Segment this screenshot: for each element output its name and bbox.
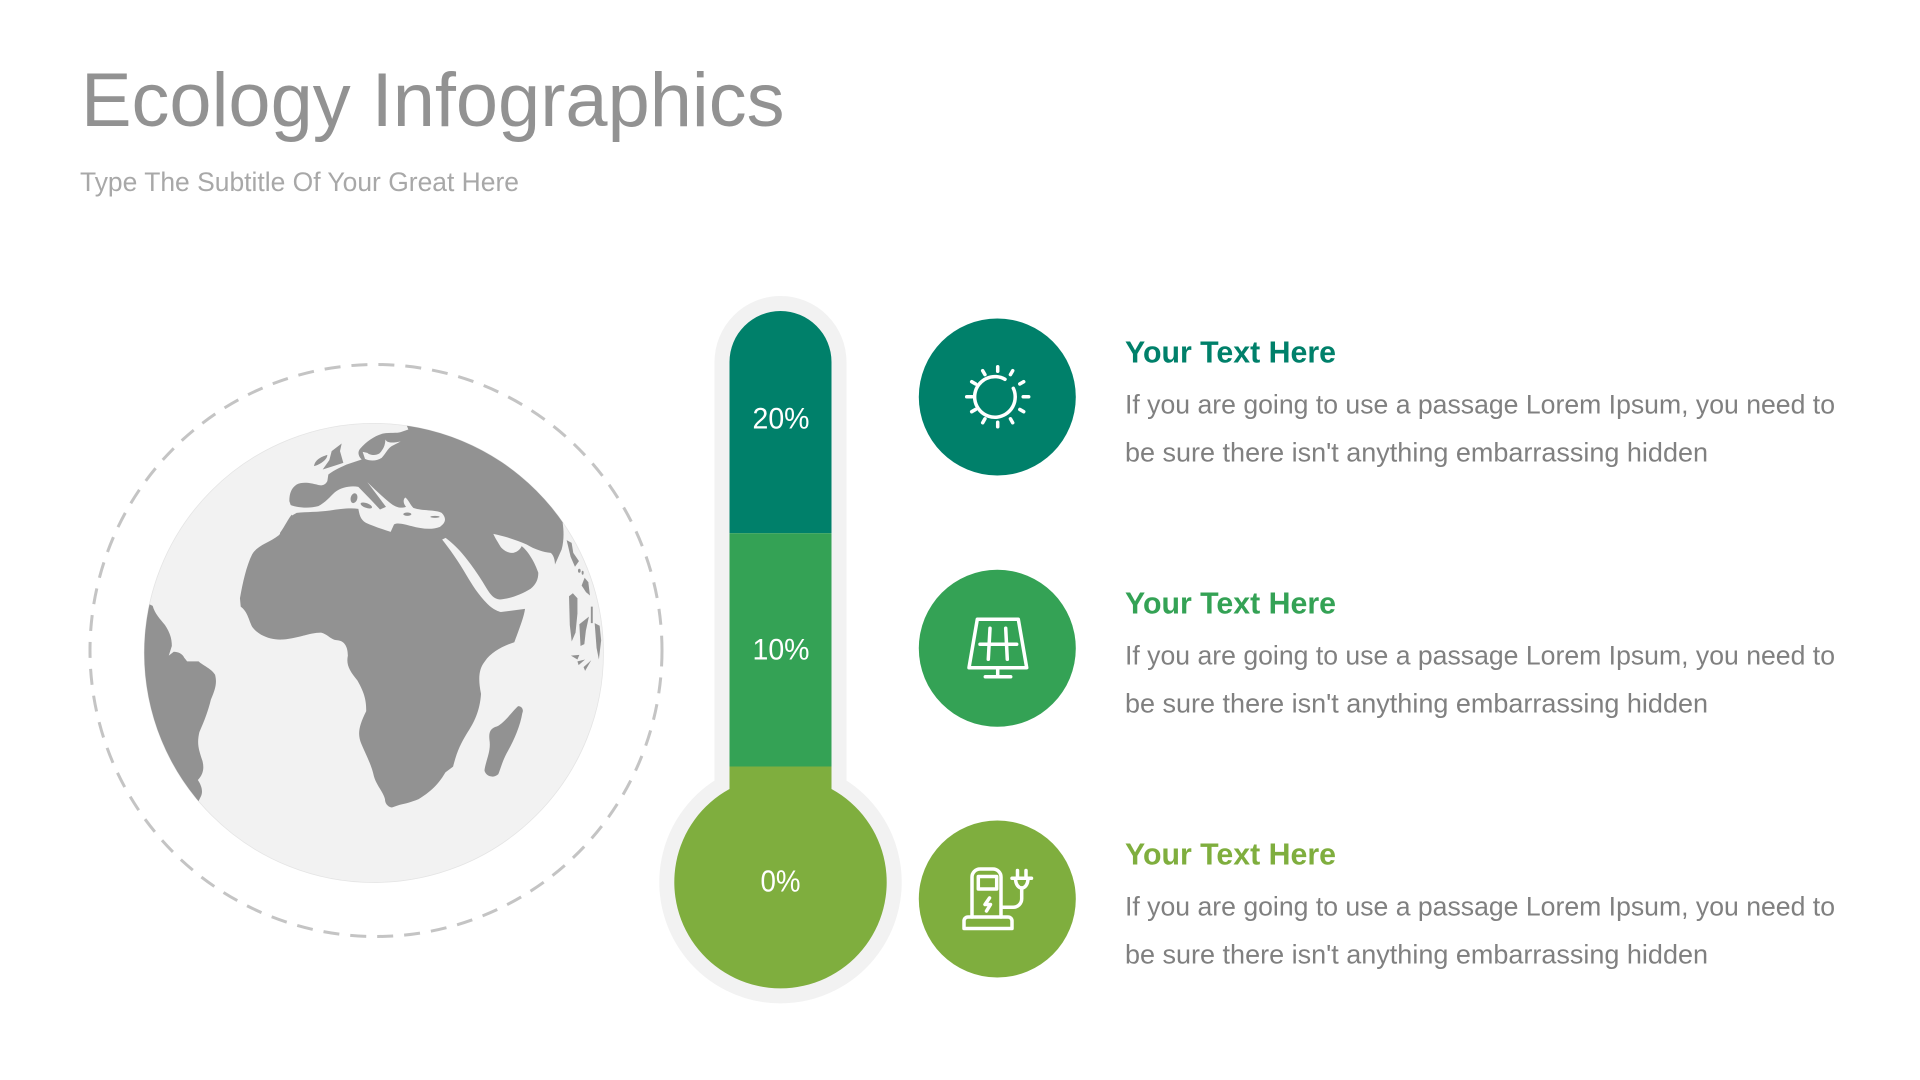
land: Europe and Asia xyxy=(280,423,580,599)
label: 0%: 0% xyxy=(760,864,800,899)
block 1 text xyxy=(1125,334,1835,468)
dashed ring around globe xyxy=(90,364,662,936)
body 3 line 1: If you are going to use a passage Lorem Ipsum, you need to xyxy=(1125,892,1835,922)
block 3 text xyxy=(1125,836,1835,970)
land: Ireland xyxy=(314,455,327,466)
block 2 text xyxy=(1125,586,1835,719)
heading 3: Your Text Here xyxy=(1125,836,1336,872)
thermometer xyxy=(660,300,900,1006)
body 2 line 1: If you are going to use a passage Lorem Ipsum, you need to xyxy=(1125,641,1835,671)
heading 1: Your Text Here xyxy=(1125,334,1336,370)
icon: solar panel in green circle xyxy=(919,570,1076,727)
label: 10%: 10% xyxy=(752,634,810,666)
body 2 line 2: be sure there isn't anything embarrassing hidden xyxy=(1125,689,1708,719)
land: Madagascar xyxy=(484,706,523,777)
body 3 line 2: be sure there isn't anything embarrassing hidden xyxy=(1125,940,1708,970)
body 1 line 2: be sure there isn't anything embarrassing hidden xyxy=(1125,438,1708,468)
land: Eurasia, seas and islands of the north xyxy=(280,423,590,599)
land: Africa xyxy=(240,513,525,808)
sea: Baltic xyxy=(363,439,401,460)
sea: Mediterranean, Adriatic and Aegean xyxy=(288,482,445,532)
land: Asian islands xyxy=(569,593,577,641)
thermometer segments xyxy=(674,311,887,988)
label: 20%: 20% xyxy=(752,402,810,436)
subtitle: Type The Subtitle Of Your Great Here xyxy=(80,167,519,197)
icon: sun in teal circle xyxy=(919,318,1076,476)
globe illustration xyxy=(118,423,603,883)
title: Ecology Infographics xyxy=(81,58,784,143)
land: Britain xyxy=(323,443,343,469)
land: Japan and Philippines chain xyxy=(567,540,579,567)
heading 2: Your Text Here xyxy=(1125,586,1336,620)
land: South America xyxy=(144,604,216,801)
body 1 line 1: If you are going to use a passage Lorem Ipsum, you need to xyxy=(1125,390,1835,420)
icon: EV charger in lime circle xyxy=(919,820,1076,978)
thermometer outer casing xyxy=(674,311,887,988)
Mediterranean islands xyxy=(350,493,358,504)
